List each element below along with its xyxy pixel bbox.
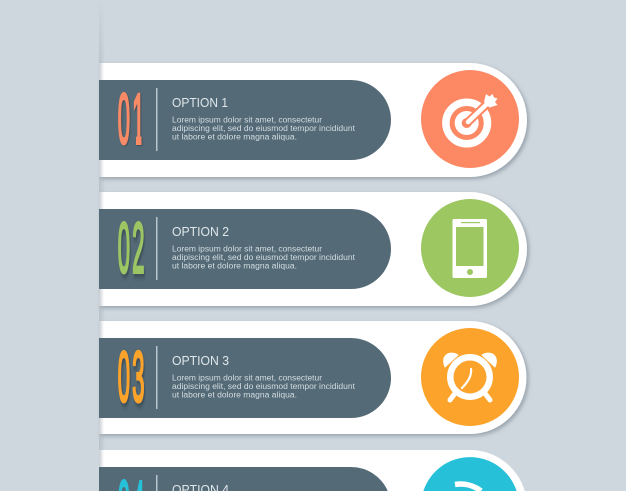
icon: wifi signal bbox=[423, 457, 517, 491]
text block 1 bbox=[172, 116, 356, 142]
number 02: 02 bbox=[118, 209, 147, 289]
panel: option 3 bbox=[99, 321, 526, 434]
text block 2: Lorem ipsum dolor sit amet, consectetur bbox=[172, 244, 322, 254]
text block 3: Lorem ipsum dolor sit amet, consectetur bbox=[172, 374, 322, 382]
divider 2 bbox=[156, 217, 158, 280]
divider 3 bbox=[156, 346, 158, 409]
text block 1: adipiscing elit, sed do eiusmod tempor incididunt bbox=[172, 124, 356, 133]
heading 1: OPTION 1 bbox=[172, 96, 228, 110]
text block 1: ut labore et dolore magna aliqua. bbox=[172, 132, 297, 142]
icon: target bbox=[421, 70, 519, 168]
text block 2: ut labore et dolore magna aliqua. bbox=[172, 262, 297, 270]
bar 2 bbox=[99, 209, 391, 289]
fold shadow on the left edge bbox=[99, 22, 103, 450]
heading 2: OPTION 2 bbox=[172, 225, 229, 239]
number 03: 03 bbox=[118, 338, 147, 418]
divider 4 bbox=[156, 475, 158, 491]
card 4 bbox=[99, 450, 525, 491]
text block 2 bbox=[172, 244, 356, 270]
text block 2: adipiscing elit, sed do eiusmod tempor incididunt bbox=[172, 253, 356, 262]
card 1 bbox=[99, 63, 527, 177]
bar 3 bbox=[99, 338, 391, 418]
icon: smartphone bbox=[421, 199, 519, 297]
panel: option 2 bbox=[99, 192, 527, 306]
card 2 bbox=[99, 192, 527, 306]
text block 3: adipiscing elit, sed do eiusmod tempor incididunt bbox=[172, 382, 356, 391]
icon: alarm clock bbox=[421, 328, 519, 426]
panel: option 1 bbox=[99, 63, 527, 177]
card 3 bbox=[99, 321, 526, 434]
text block 1: Lorem ipsum dolor sit amet, consectetur bbox=[172, 116, 322, 124]
number 01: 01 bbox=[118, 80, 147, 160]
heading 3: OPTION 3 bbox=[172, 354, 229, 368]
bar 4 bbox=[99, 467, 388, 491]
text block 3 bbox=[172, 374, 356, 400]
divider 1 bbox=[156, 88, 158, 151]
text block 3: ut labore et dolore magna aliqua. bbox=[172, 390, 297, 400]
panel: option 4 bbox=[99, 450, 525, 491]
bar 1 bbox=[99, 80, 391, 160]
